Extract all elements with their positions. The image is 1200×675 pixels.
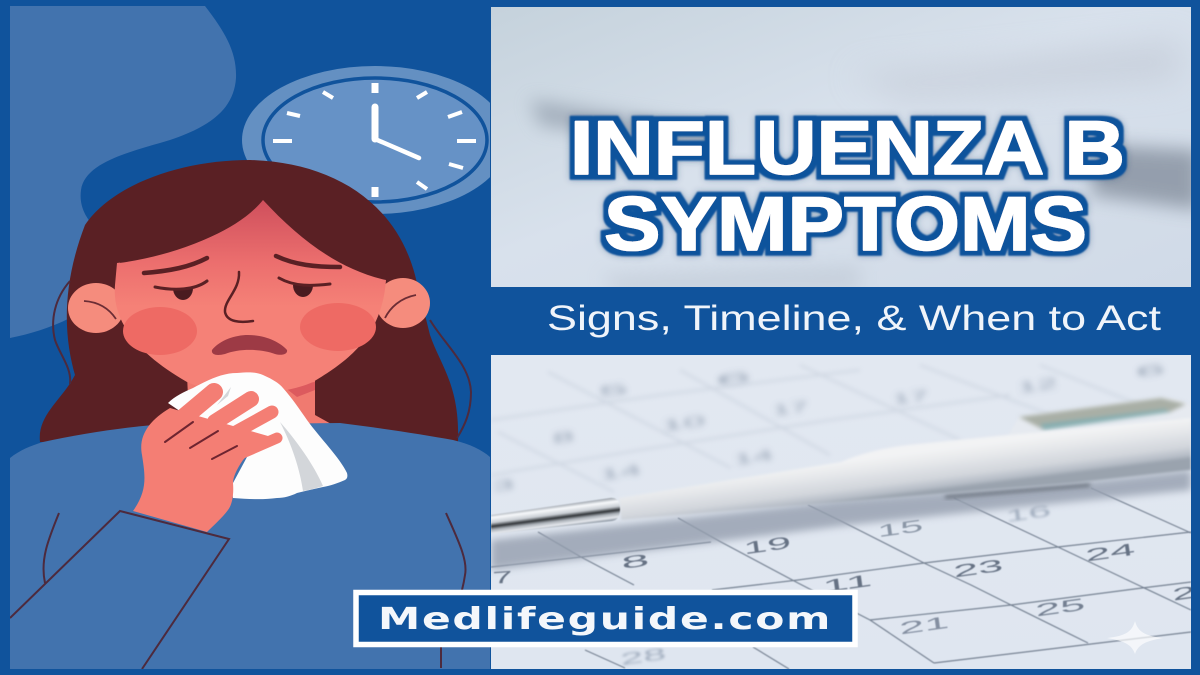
calendar numbers: 23 (952, 556, 1004, 581)
hair (40, 160, 458, 442)
nose (225, 272, 253, 322)
icon: thermometer (491, 398, 1191, 534)
tissue (168, 372, 347, 499)
website text: Medlifeguide.com (378, 602, 832, 637)
website badge (356, 592, 855, 644)
panel: sick woman illustration (10, 6, 508, 669)
blurred calendar numbers (491, 360, 1167, 495)
neck (187, 380, 330, 424)
subtitle: Signs, Timeline, & When to Act (547, 299, 1161, 338)
hand (133, 392, 282, 532)
blurred calendar numbers: 17 (771, 398, 810, 418)
blurred calendar numbers: 14 (732, 446, 775, 468)
blurred calendar numbers: 3 (491, 476, 516, 495)
thermometer contact shadow (945, 485, 1090, 497)
calendar numbers: 24 (1084, 540, 1136, 565)
calendar numbers: 15 (876, 516, 924, 541)
calendar numbers: 28 (619, 644, 667, 669)
calendar numbers: 8 (620, 550, 650, 573)
blurred calendar numbers: 14 (598, 461, 643, 483)
eyebrows (144, 256, 340, 273)
title (570, 106, 1125, 267)
calendar numbers (492, 501, 1197, 669)
calendar numbers: 16 (1004, 501, 1052, 526)
fringe line (120, 234, 218, 263)
calendar numbers: 25 (1034, 595, 1086, 620)
metal tip (491, 498, 620, 534)
face (115, 200, 386, 393)
blurred calendar numbers: 6 (714, 367, 753, 388)
icon: sparkle watermark (1107, 621, 1163, 654)
blurred calendar numbers: 8 (551, 428, 576, 447)
sharp calendar grid lines (491, 488, 1191, 669)
cheek: right (300, 303, 376, 351)
calendar numbers: 19 (742, 533, 792, 558)
mouth (212, 335, 287, 355)
thermometer body (619, 418, 1191, 520)
calendar numbers: 11 (821, 571, 873, 596)
cheek: left (123, 307, 197, 355)
panel: blurred photo top (491, 7, 1200, 295)
blurred calendar numbers: 12 (1016, 374, 1059, 396)
small tissue crease (217, 387, 231, 405)
ear: right (376, 278, 430, 328)
icon: wall clock (242, 66, 508, 214)
sleeve cuff (10, 511, 229, 669)
calendar numbers: 2 (1171, 582, 1197, 605)
background blob (10, 6, 236, 338)
blurred streaks (528, 95, 705, 141)
tissue fold (280, 422, 323, 491)
sweater body (10, 423, 490, 669)
blurred calendar numbers: 17 (891, 387, 930, 407)
blurred calendar numbers: 10 (660, 412, 707, 434)
thermometer display housing (1080, 414, 1178, 427)
thermometer shadow (491, 470, 1191, 570)
title line 1: INFLUENZA B (570, 106, 1125, 191)
knuckle lines (165, 422, 237, 459)
blurred calendar numbers: 6 (1134, 360, 1167, 380)
calendar numbers: 7 (492, 567, 513, 588)
blurred upper calendar grid (552, 372, 1010, 466)
thermometer display (1019, 398, 1186, 430)
fingers (183, 392, 277, 455)
blurred calendar numbers: 5 (597, 380, 630, 400)
eyes (155, 278, 330, 300)
panel: thermometer on calendar photo (491, 355, 1197, 669)
title line 2: SYMPTOMS (604, 182, 1087, 267)
sleeve seam lines (43, 513, 466, 668)
calendar numbers: 21 (898, 613, 950, 638)
loose hair strands (53, 281, 471, 438)
ear: left (68, 283, 124, 333)
neck shadow (288, 382, 315, 397)
